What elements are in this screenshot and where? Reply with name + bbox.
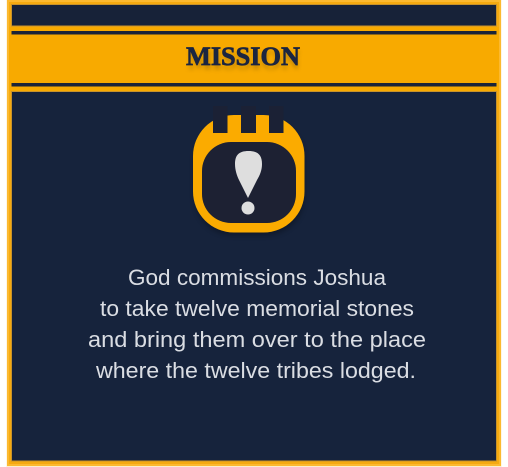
heading shadow: MISSION xyxy=(188,46,300,75)
mission text block: God commissions Joshua xyxy=(128,265,387,290)
main navy panel xyxy=(12,92,496,461)
mission text block: to take twelve memorial stones xyxy=(100,296,414,321)
icon: calendar alert xyxy=(193,106,304,235)
icon binder tabs xyxy=(213,106,284,133)
icon exclamation mark xyxy=(235,151,262,214)
icon body xyxy=(193,115,304,232)
mission text block xyxy=(88,265,426,383)
heading band xyxy=(9,27,499,91)
heading: MISSION xyxy=(186,42,300,71)
mission text block: where the twelve tribes lodged. xyxy=(95,358,416,383)
mission text block: and bring them over to the place xyxy=(88,327,426,352)
top navy strip xyxy=(12,4,496,26)
icon inner screen xyxy=(202,142,296,223)
